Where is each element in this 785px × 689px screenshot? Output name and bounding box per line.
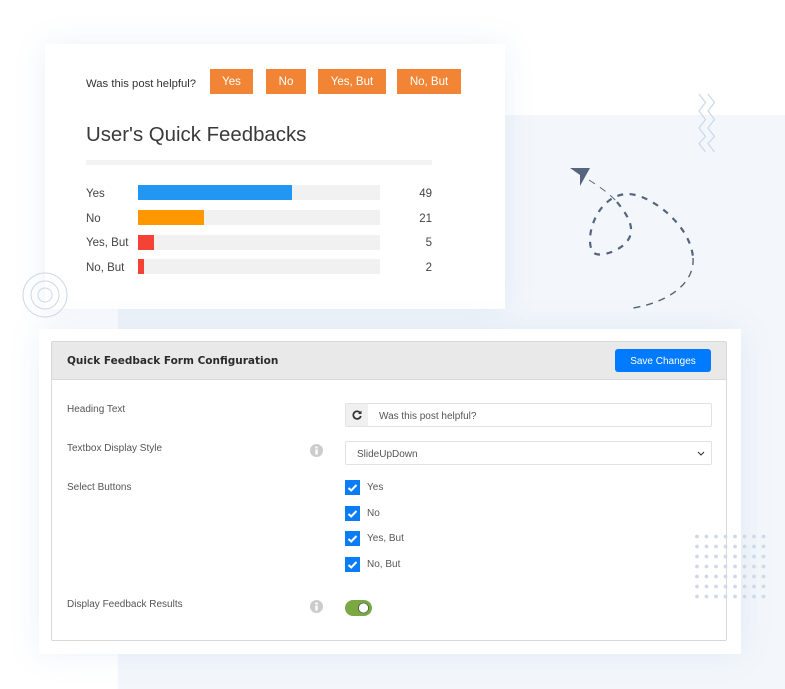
checkbox label: Yes: Yes bbox=[367, 482, 383, 493]
value: 5: 5 bbox=[426, 237, 432, 249]
decoration: dot grid bbox=[695, 534, 766, 598]
checkbox: Yes, But bbox=[345, 531, 360, 546]
checkbox: Yes bbox=[345, 480, 360, 495]
label: Display Feedback Results: Display Feedback Results bbox=[67, 599, 183, 610]
label: Select Buttons: Select Buttons bbox=[67, 482, 131, 493]
button: Yes: Yes bbox=[222, 76, 241, 88]
button: Yes, But bbox=[318, 69, 386, 94]
button: Yes, But: Yes, But bbox=[331, 76, 373, 88]
input value: Was this post helpful? bbox=[379, 411, 476, 422]
button: No bbox=[266, 69, 306, 94]
value: 21: 21 bbox=[419, 213, 432, 225]
icon: chevron bbox=[698, 452, 704, 456]
label: Textbox Display Style: Textbox Display Style bbox=[67, 443, 162, 454]
select value: SlideUpDown bbox=[357, 449, 418, 460]
label: No, But: No, But bbox=[86, 262, 124, 274]
toggle switch bbox=[345, 600, 372, 616]
heading: User's Quick Feedbacks: User's Quick Feedbacks bbox=[86, 124, 306, 146]
input: heading text bbox=[345, 403, 712, 427]
value: 49: 49 bbox=[419, 188, 432, 200]
icon: info bbox=[310, 600, 323, 613]
bar: No, But bbox=[138, 259, 380, 274]
icon: info bbox=[310, 444, 323, 457]
value: 2: 2 bbox=[426, 262, 432, 274]
select: display style bbox=[345, 441, 712, 465]
checkbox label: No: No bbox=[367, 508, 380, 519]
checkbox label: Yes, But: Yes, But bbox=[367, 533, 404, 544]
label: Heading Text: Heading Text bbox=[67, 404, 125, 415]
input reset addon bbox=[346, 404, 368, 426]
panel: feedback results card bbox=[45, 44, 505, 309]
button: No: No bbox=[279, 76, 293, 88]
text: question prompt: Was this post helpful? bbox=[86, 78, 196, 90]
bar: No bbox=[138, 210, 380, 225]
panel: form header bar bbox=[52, 342, 726, 380]
checkbox label: No, But: No, But bbox=[367, 559, 400, 570]
decoration: concentric circles bbox=[22, 272, 68, 318]
label: Yes: Yes bbox=[86, 188, 105, 200]
button: No, But: No, But bbox=[410, 76, 448, 88]
button: Save Changes: Save Changes bbox=[630, 356, 696, 367]
decoration: zigzag lines bbox=[698, 94, 715, 152]
checkbox: No, But bbox=[345, 557, 360, 572]
button: Save Changes bbox=[615, 349, 711, 372]
button: No, But bbox=[397, 69, 461, 94]
panel: configuration form frame bbox=[51, 341, 727, 641]
background panel bbox=[118, 115, 785, 689]
bar: Yes bbox=[138, 185, 380, 200]
heading: form title: Quick Feedback Form Configuration bbox=[67, 355, 278, 367]
checkbox: No bbox=[345, 506, 360, 521]
divider bar bbox=[86, 160, 432, 165]
label: No: No bbox=[86, 213, 101, 225]
button: Yes bbox=[210, 69, 253, 94]
bar: Yes, But bbox=[138, 235, 380, 250]
icon: dashed flight path with arrow bbox=[570, 168, 694, 309]
panel: configuration card bbox=[39, 329, 741, 654]
label: Yes, But: Yes, But bbox=[86, 237, 128, 249]
